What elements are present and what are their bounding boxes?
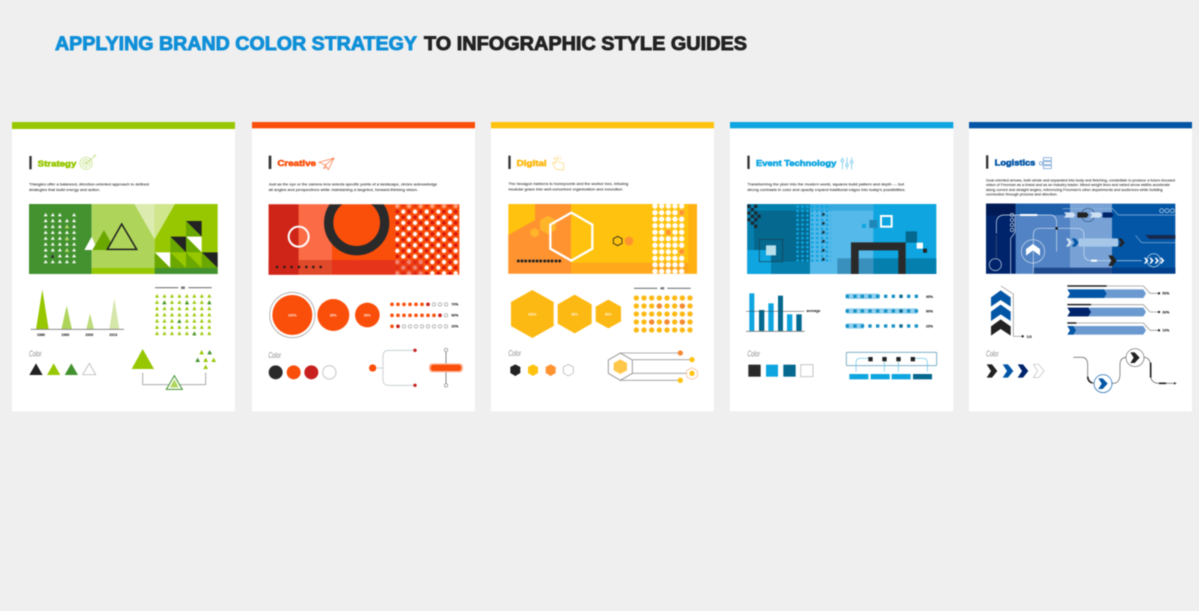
chart: hexagon sizes: 60% [605,313,612,317]
chart: triangle peaks by year: 2010 [109,333,117,337]
text: event technology description: strong contrasts in color and opacity expand traditional edges into today's possibilities. [747,187,906,192]
heading: event technology: Event Technology [756,158,837,168]
chart: arrow progress bars: 50% [1162,292,1170,296]
chart: circle sizes: 100% [288,314,297,318]
chart: hexagon sizes: 80% [571,312,578,316]
color swatches: squares: Color [747,349,760,358]
text: strategy description: strategies that build energy and action. [29,187,100,192]
text: event technology description: Transforming the pixel into the modern world, squares build pattern and depth — but [747,181,905,186]
heading: strategy: Strategy [38,159,77,169]
chart: dot grid 40 [633,287,694,334]
icon: target [80,154,96,169]
diagram: curved arrow path [1073,349,1177,393]
chart: dot grid 40: 40 [660,287,664,291]
chart: circle sizes [270,292,380,338]
chart: bars with average: average [807,309,820,313]
text: digital description [508,181,628,192]
diagram: circle branch [369,349,417,387]
chart: triangle peaks by year: 2000 [85,333,93,337]
color swatches: chevrons: Color [986,349,999,358]
chart: square progress rows: 90% [926,310,933,314]
panel: logistics [969,122,1192,411]
text: logistics description [986,177,1175,197]
chart: circle sizes: 80% [330,314,337,318]
diagram: hexagon connectors [608,350,697,383]
chart: triangle peaks by year [31,289,124,337]
text: logistics description: connection through process and direction. [986,192,1058,197]
icon: touch hand [552,155,564,170]
text: logistics description: along curved and straight angles, referencing Freeman's other departments and audiences while building [986,187,1163,192]
chart: square progress rows [846,294,933,329]
chart: dot ratings [390,302,459,329]
text: logistics description: Goal oriented arrows, both whole and separated into body and fletching, constellate to produce a future-focused [986,177,1175,182]
banner: arrows [986,204,1175,274]
color swatches: chevrons [986,349,1044,378]
text: digital description: The hexagon harkens to honeycomb and the worker bee, infusing [508,181,628,186]
icon: network boxes [1039,158,1051,169]
chart: triangle grid 56 [153,286,213,337]
chart: hexagon sizes: 100% [528,312,537,316]
color swatches: circles: Color [268,351,281,360]
heading: creative: Creative [277,158,316,168]
chart: stacked chevrons 1/3: 1/3 [1027,335,1032,339]
panel: event technology [730,122,953,411]
diagram: blurred pill [429,348,463,387]
chart: arrow progress bars: 30% [1162,310,1170,314]
diagram: square connectors [846,352,937,379]
text: event technology description [747,181,906,192]
chart: arrow progress bars [1067,286,1170,335]
chart: arrow progress bars: 10% [1162,329,1170,333]
color swatches: hexagons: Color [508,349,521,358]
chart: dot ratings: 90% [451,314,459,318]
banner: squares [747,204,936,274]
panel: creative [252,122,475,411]
chart: square progress rows: 45% [926,295,933,299]
color swatches: triangles [29,350,96,375]
chart: circle sizes: 60% [364,314,371,318]
chart: triangle grid 56: 56 [181,286,185,290]
text: creative description [269,182,438,192]
icon: sliders [841,157,853,169]
heading: digital: Digital [517,158,547,168]
banner: circles [269,195,459,275]
color swatches: squares [747,349,813,377]
banner: hexagons [508,204,697,274]
text: creative description: Just as the eye or the camera lens selects specific points of a landscape, circles acknowledge [269,182,438,187]
color swatches: triangles: Color [29,350,42,359]
heading: logistics: Logistics [995,158,1036,168]
chart: stacked chevrons 1/3 [991,286,1032,339]
diagram: triangle flow [132,349,216,389]
chart: square progress rows: 25% [926,324,933,328]
text: strategy description [29,181,149,192]
panel: strategy [12,122,235,411]
title: TO INFOGRAPHIC STYLE GUIDES [424,33,747,55]
title [55,33,747,55]
text: strategy description: Triangles offer a balanced, direction-oriented approach to defined [29,181,149,186]
title: APPLYING BRAND COLOR STRATEGY [55,33,417,55]
color swatches: circles [268,351,336,379]
chart: triangle peaks by year: 1990 [61,333,69,337]
text: digital description: modular grace into well-conceived organization and execution. [508,187,623,192]
icon: paper plane [319,158,334,170]
text: creative description: all angles and perspectives while maintaining a targeted, forward-thinking vision. [269,187,418,192]
chart: bars with average [746,293,820,331]
chart: triangle peaks by year: 1980 [37,333,45,337]
chart: hexagon sizes [511,290,621,338]
text: logistics description: vision of Freeman as a brand and as an industry leader. Mixed weight lines and varied arrow widths accelerate [986,182,1171,187]
color swatches: hexagons [508,349,573,376]
chart: dot ratings: 20% [451,325,459,329]
panel: digital [491,122,714,411]
chart: dot ratings: 70% [451,303,459,307]
banner: triangles [29,204,218,274]
